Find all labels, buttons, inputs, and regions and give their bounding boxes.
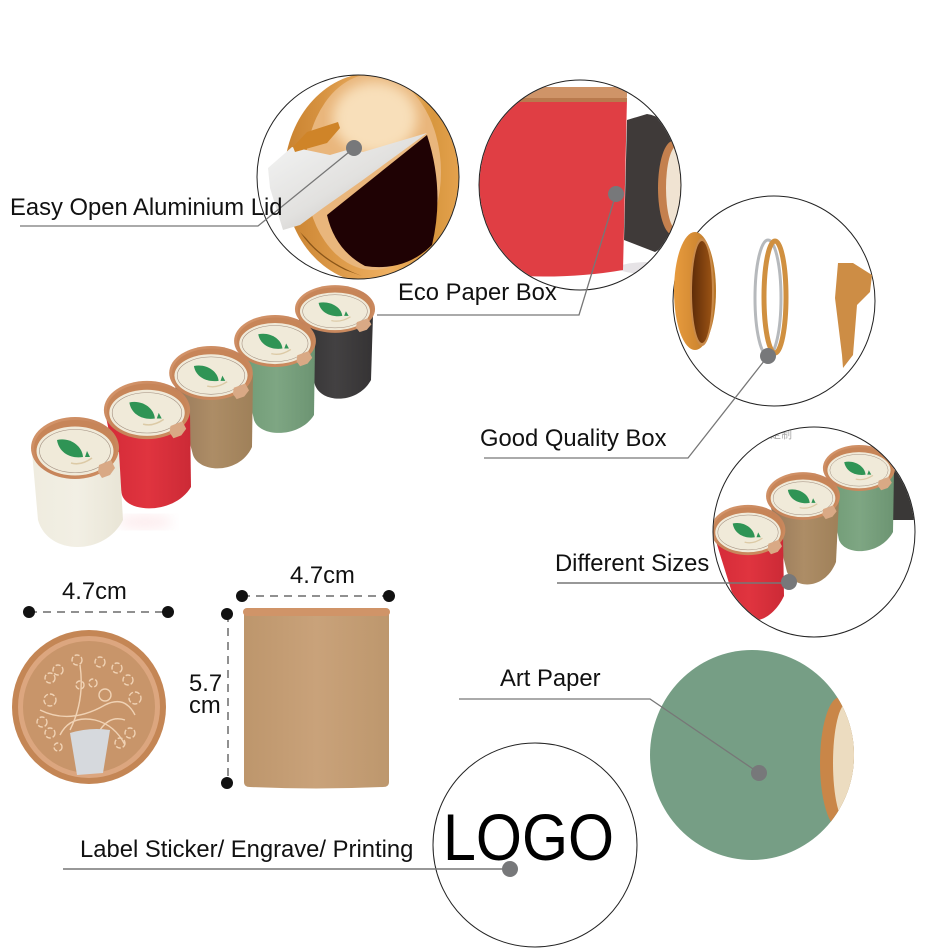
kraft can front view — [243, 608, 390, 788]
dimension: can height: 5.7 — [189, 670, 222, 697]
can: white — [31, 417, 123, 547]
callout: art paper: Art Paper — [500, 665, 601, 692]
circle: logo — [433, 743, 637, 947]
circle: good quality box rings — [673, 196, 875, 406]
circle: aluminium lid detail — [255, 72, 461, 283]
dimension: lid width: 4.7cm — [62, 578, 127, 605]
dimension: can height — [189, 608, 233, 789]
callout: easy open lid — [10, 140, 362, 226]
callout: label sticker — [63, 836, 518, 877]
callout: eco paper box — [377, 186, 624, 315]
row of five cans — [31, 285, 375, 547]
callout: different sizes: Different Sizes — [555, 550, 709, 577]
can: black — [295, 285, 375, 399]
lid top view — [12, 630, 166, 784]
circle: art paper — [650, 650, 861, 860]
dimension: can width — [236, 562, 395, 602]
dimension: can width: 4.7cm — [290, 562, 355, 589]
callout: good quality box — [480, 348, 776, 458]
callout: different sizes — [555, 550, 797, 590]
circle: eco paper box detail — [470, 78, 688, 290]
can: kraft — [169, 346, 253, 468]
can: red — [104, 381, 191, 529]
callout: good quality box: Good Quality Box — [480, 425, 667, 452]
circle: different sizes — [709, 427, 919, 637]
can: green — [234, 315, 316, 433]
dimension: can height: cm — [189, 692, 221, 719]
dimension: lid width — [23, 578, 174, 618]
circle: different sizes: 定制 — [770, 427, 792, 441]
circle: logo: LOGO — [443, 800, 614, 874]
callout: eco paper box: Eco Paper Box — [398, 279, 557, 306]
callout: label sticker: Label Sticker/ Engrave/ Printing — [80, 836, 413, 863]
callout: art paper — [459, 665, 767, 781]
callout: easy open lid: Easy Open Aluminium Lid — [10, 194, 282, 221]
